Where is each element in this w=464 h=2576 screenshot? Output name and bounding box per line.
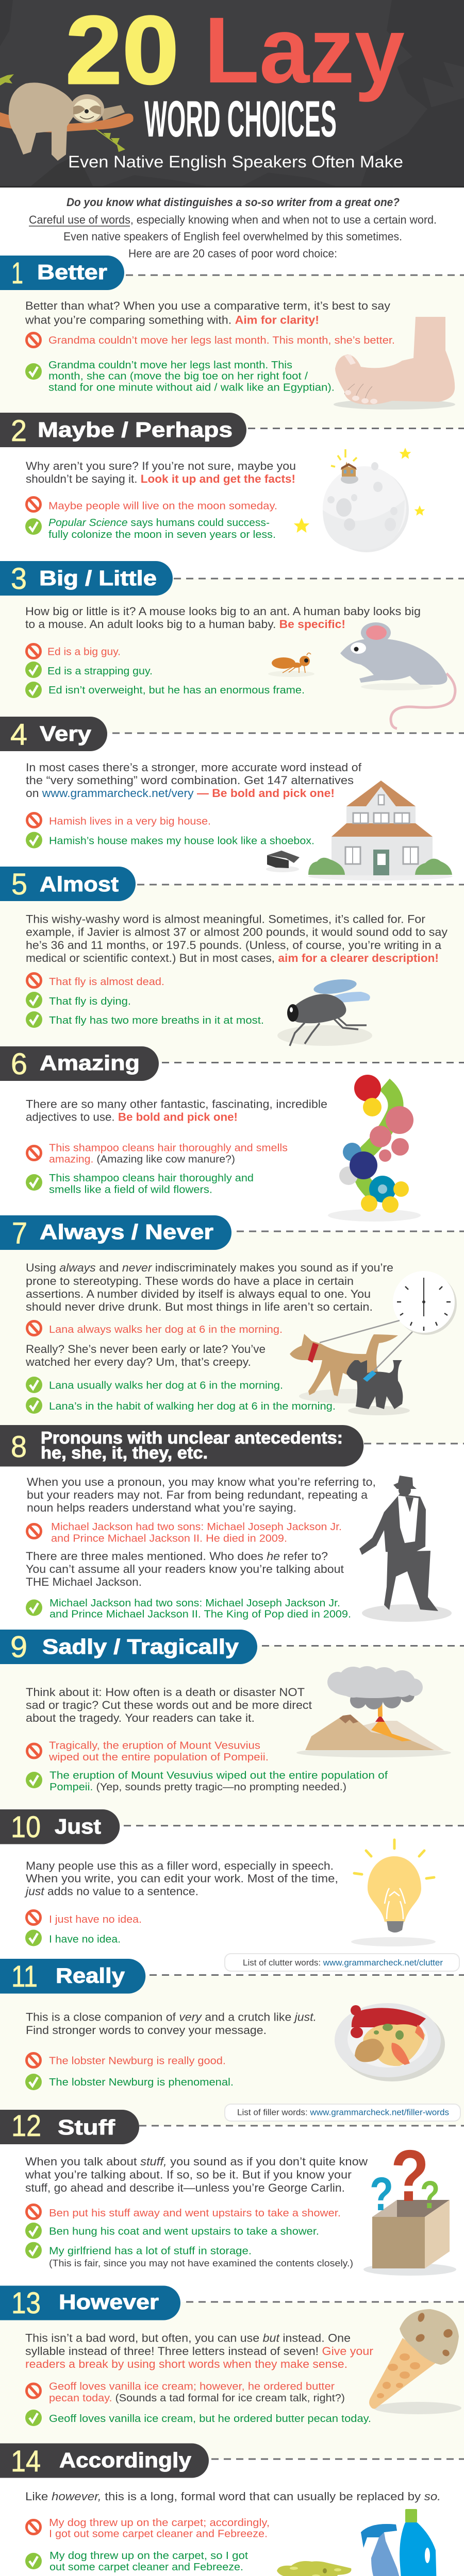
wrong example: Ed is a big guy. [47, 647, 121, 658]
text block [27, 1476, 376, 1514]
right example [26, 1598, 351, 1620]
text block: just adds no value to a sentence. [24, 1885, 198, 1898]
illustration: mouse [340, 622, 455, 728]
heading: 8 Pronouns: 8 [11, 1430, 27, 1464]
right example: I have no idea. [49, 1934, 121, 1945]
text block [24, 1859, 338, 1898]
subtitle: Even Native English Speakers Often Make [68, 152, 403, 171]
heading: 7 Always / Never: 7 [12, 1217, 27, 1250]
right example [25, 2223, 319, 2239]
illustration: Michael Jackson silhouette [359, 1476, 452, 1622]
panel: header [0, 0, 464, 188]
illustration: box with question marks: ? [420, 2173, 440, 2217]
wrong example: I just have no idea. [49, 1914, 142, 1925]
heading: 13 However: 13 [11, 2286, 41, 2320]
right example: and Prince Michael Jackson II. The King of Pop died in 2009. [49, 1608, 351, 1620]
wrong example: amazing. (Amazing like cow manure?) [49, 1154, 235, 1165]
panel: introduction [29, 196, 437, 260]
panel: 1 Better [0, 256, 464, 429]
heading: 5 Almost: Almost [40, 872, 119, 896]
text block [26, 913, 448, 964]
right example: Hamish’s house makes my house look like a shoebox. [49, 836, 314, 847]
wrong example [27, 1321, 283, 1335]
heading: 12 Stuff [0, 2109, 464, 2144]
text block [26, 1686, 312, 1724]
text block: Why aren’t you sure? If you’re not sure, maybe you [26, 460, 296, 472]
text block [26, 761, 362, 800]
wrong example: Michael Jackson had two sons: Michael Joseph Jackson Jr. [51, 1521, 342, 1533]
right example: smells like a field of wild flowers. [49, 1184, 212, 1195]
text block: Using always and never indiscriminately makes you sound as if you’re [26, 1261, 393, 1274]
illustration: clock [393, 1271, 457, 1335]
heading: 8 Pronouns [0, 1425, 464, 1466]
right example: That fly has two more breaths in it at most. [49, 1015, 264, 1026]
right example [26, 1011, 264, 1028]
right example: The eruption of Mount Vesuvius wiped out the entire population of [49, 1770, 388, 1782]
heading: 10 Just: Just [55, 1815, 101, 1838]
right example [26, 992, 131, 1008]
callout: filler words [225, 2104, 460, 2121]
panel: 5 Almost [0, 867, 464, 1063]
text block [25, 2155, 368, 2194]
text block [25, 299, 390, 327]
wrong example [27, 2205, 341, 2219]
text block [26, 1261, 393, 1313]
right example: Lana’s in the habit of walking her dog at 6 in the morning. [49, 1401, 336, 1412]
right example: Popular Science says humans could success- [48, 517, 270, 529]
text block: prone to stereotyping. These words do have a place in certain [26, 1275, 354, 1287]
heading: 9 Sadly / Tragically: Sadly / Tragically [42, 1635, 239, 1658]
text block: Think about it: How often is a death or disaster NOT [26, 1686, 305, 1699]
panel: 6 Amazing [0, 1046, 464, 1231]
text block: assertions. A number divided by itself is always equal to one. You [26, 1287, 371, 1300]
text block: There are so many other fantastic, fascinating, incredible [26, 1098, 327, 1111]
intro line 2: Even native speakers of English feel overwhelmed by this sometimes. [63, 230, 402, 243]
heading: 5 Almost: 5 [11, 868, 27, 901]
illustration: vomit puddle [277, 2561, 351, 2576]
commentary: You can’t assume all your readers know you’re talking about [26, 1563, 344, 1575]
panel: 11 Really [0, 1959, 464, 2126]
wrong example [27, 1910, 142, 1925]
illustration: flower S [328, 1075, 421, 1222]
heading: 10 Just [0, 1809, 464, 1844]
heading: 4 Very [0, 717, 464, 752]
right example: out some carpet cleaner and Febreeze. [49, 2562, 243, 2573]
text block: When you talk about stuff, you sound as if you don’t quite know [25, 2155, 368, 2168]
right example [26, 832, 314, 849]
illustration: moon with church and stars [294, 448, 425, 552]
heading: 2 Maybe / Perhaps: 2 [11, 414, 27, 448]
wrong example [27, 813, 211, 827]
panel: 3 Big / Little [0, 561, 464, 733]
wrong example: I got out some carpet cleaner and Febreeze. [49, 2528, 268, 2539]
heading: 7 Always / Never: Always / Never [40, 1220, 213, 1244]
heading: 5 Almost [0, 867, 464, 901]
text block: to a mouse. An adult looks big to a human baby. Be specific! [25, 618, 345, 631]
panel: 7 Always / Never [0, 1215, 464, 1444]
illustration: volcano [296, 1666, 451, 1757]
wrong example: Maybe people will live on the moon someday. [48, 501, 277, 512]
text block: stuff, go ahead and describe it—unless you’re George Carlin. [25, 2181, 345, 2194]
text block [26, 2010, 317, 2037]
right example [26, 1173, 254, 1195]
callout: filler words: List of filler words: www.grammarcheck.net/filler-words [237, 2107, 449, 2117]
right example: Ed is a strapping guy. [47, 666, 153, 677]
heading: 14 Accordingly: 14 [11, 2445, 41, 2478]
text block: what you’re talking about. If so, so be it. But if you know your [25, 2168, 352, 2181]
panel: 8 Pronouns with unclear antecedents [0, 1425, 464, 1646]
heading: 11 Really: 11 [11, 1960, 38, 1993]
heading: 2 Maybe / Perhaps [0, 413, 464, 448]
text block: This wishy-washy word is almost meaningful. Sometimes, it’s called for. For [26, 913, 425, 926]
text block: When you write, you can edit your work. Most of the time, [26, 1872, 338, 1885]
illustration: box with question marks [363, 2135, 456, 2276]
text block: Many people use this as a filler word, especially in speech. [26, 1859, 334, 1872]
wrong example [27, 974, 164, 988]
right example [26, 1377, 283, 1393]
heading: 6 Amazing: Amazing [40, 1051, 140, 1075]
text block: This isn’t a bad word, but often, you can use but instead. One [25, 2332, 351, 2345]
heading: 14 Accordingly [0, 2443, 464, 2478]
text block: should never drive drunk. But most things in life aren’t so certain. [26, 1300, 373, 1313]
wrong example [27, 498, 277, 512]
commentary: THE Michael Jackson. [26, 1575, 142, 1588]
right example: This shampoo cleans hair thoroughly and [49, 1173, 254, 1184]
wrong example: This shampoo cleans hair thoroughly and smells [49, 1142, 288, 1154]
wrong example [27, 1740, 269, 1763]
text block: In most cases there’s a stronger, more accurate word instead of [26, 761, 362, 774]
wrong example: Geoff loves vanilla ice cream; however, he ordered butter [49, 2381, 335, 2393]
right example [25, 2410, 371, 2426]
right example [25, 2074, 234, 2090]
right example: My dog threw up on the carpet, so I got [49, 2550, 248, 2562]
commentary: Really? She’s never been early or late? You’ve [26, 1343, 266, 1355]
text block [25, 605, 421, 631]
right example: My girlfriend has a lot of stuff in storage. [49, 2246, 252, 2257]
heading: 1 Better: 1 [11, 257, 23, 290]
right example: fully colonize the moon in seven years or less. [48, 529, 276, 540]
right example: Lana usually walks her dog at 6 in the morning. [49, 1380, 283, 1391]
heading: 9 Sadly / Tragically: 9 [10, 1631, 27, 1664]
intro question: Do you know what distinguishes a so-so writer from a great one? [67, 196, 400, 209]
illustration: lobster plate [335, 2003, 445, 2081]
heading: 12 Stuff: 12 [11, 2109, 41, 2143]
right example: Ben hung his coat and went upstairs to take a shower. [49, 2226, 319, 2238]
wrong example [27, 2054, 226, 2067]
text block: but your readers may not. Far from being redundant, repeating a [27, 1488, 368, 1501]
wrong example [27, 2517, 270, 2539]
right example: That fly is dying. [49, 996, 131, 1007]
heading: 6 Amazing: 6 [11, 1047, 27, 1081]
heading: 3 Big / Little: Big / Little [39, 566, 157, 590]
wrong example [27, 1142, 288, 1165]
wrong example: The lobster Newburg is really good. [49, 2056, 226, 2067]
illustration: ice cream cone [369, 2309, 461, 2414]
illustration: fly [277, 977, 372, 1046]
right example: month, she can (move the big toe on her right foot / [48, 371, 308, 382]
wrong example: Ben put his stuff away and went upstairs to take a shower. [49, 2208, 341, 2219]
text block: sad or tragic? Cut these words out and be more direct [26, 1699, 312, 1711]
text block: noun helps readers understand what you’re saying. [27, 1501, 296, 1514]
illustration: cleaning bottles [361, 2509, 445, 2576]
right example: Geoff loves vanilla ice cream, but he ordered butter pecan today. [49, 2413, 371, 2425]
illustration: ant [268, 653, 314, 677]
heading: 4 Very: 4 [10, 718, 27, 752]
right example: Michael Jackson had two sons: Michael Joseph Jackson Jr. [49, 1598, 340, 1609]
right example [26, 1770, 388, 1793]
wrong example [27, 644, 121, 658]
heading: 8 Pronouns: he, she, it, they, etc. [41, 1443, 208, 1462]
text block [26, 460, 296, 485]
right example: stand for one minute without aid / walk like an Egyptian). [48, 382, 335, 393]
text block: about the tragedy. Your readers can take it. [26, 1711, 255, 1724]
wrong example [27, 1521, 342, 1545]
intro line 1: Careful use of words, especially knowing when and when not to use a certain word. [29, 213, 437, 226]
heading: 14 Accordingly: Accordingly [59, 2448, 191, 2472]
text block: When you use a pronoun, you may know what you’re referring to, [27, 1476, 376, 1488]
wrong example: Hamish lives in a very big house. [49, 816, 211, 827]
heading: 3 Big / Little: 3 [11, 562, 27, 596]
right example [25, 662, 153, 678]
wrong example: Lana always walks her dog at 6 in the morning. [49, 1324, 283, 1335]
text block: How big or little is it? A mouse looks big to an ant. A human baby looks big [25, 605, 421, 618]
text block: Like however, this is a long, formal word that can usually be replaced by so. [25, 2490, 441, 2503]
right example [25, 2550, 248, 2573]
wrong example: Tragically, the eruption of Mount Vesuvius [49, 1740, 260, 1752]
illustration: box with question marks: ? [370, 2168, 393, 2221]
heading: 12 Stuff: Stuff [58, 2115, 115, 2139]
illustration: sloth on branch [0, 74, 134, 161]
illustration: shoebox [266, 851, 300, 872]
text block: Better than what? When you use a comparative term, it’s best to say [25, 299, 390, 312]
wrong example: pecan today. (Sounds a tad formal for ice cream talk, right?) [49, 2393, 345, 2404]
title: Lazy: Lazy [204, 0, 405, 103]
text block: he’s 36 and 11 months, or 197.5 pounds. (Unless, of course, you’re writing in a [26, 939, 442, 952]
right example [25, 517, 276, 540]
text block: shouldn’t be saying it. Look it up and get the facts! [26, 472, 295, 485]
intro line 3: Here are are 20 cases of poor word choice: [128, 247, 337, 260]
wrong example: and Prince Michael Jackson II. He died in 2009. [51, 1533, 287, 1545]
commentary: There are three males mentioned. Who does he refer to? [26, 1550, 328, 1563]
text block: on www.grammarcheck.net/very — Be bold and pick one! [26, 787, 335, 800]
heading: 11 Really [0, 1959, 464, 1994]
text block: Find stronger words to convey your message. [26, 2024, 267, 2037]
heading: 8 Pronouns: Pronouns with unclear antecedents: [41, 1428, 343, 1447]
callout: clutter words [225, 1954, 459, 1971]
text block: This is a close companion of very and a crutch like just. [26, 2010, 317, 2024]
right example: Grandma couldn’t move her legs last month. This [48, 360, 292, 371]
text block: readers a break by using short words when they make sense. [25, 2358, 347, 2370]
wrong example [27, 2381, 345, 2404]
illustration: house [308, 781, 453, 880]
heading: 6 Amazing [0, 1046, 464, 1081]
right example [25, 1930, 121, 1946]
wrong example: My dog threw up on the carpet; accordingly, [49, 2517, 270, 2529]
panel: 2 Maybe / Perhaps [0, 413, 464, 579]
commentary [25, 1343, 266, 1368]
wrong example: wiped out the entire population of Pompeii. [48, 1752, 269, 1763]
wrong example: That fly is almost dead. [49, 976, 164, 988]
text block: what you’re comparing something with. Aim for clarity! [25, 314, 319, 327]
illustration: box with question marks: ? [391, 2135, 429, 2217]
right example [25, 360, 335, 393]
heading: 10 Just: 10 [11, 1810, 41, 1844]
panel: 10 Just [0, 1809, 464, 1975]
right example: Ed isn’t overweight, but he has an enormous frame. [48, 685, 305, 696]
text block: syllable instead of three! Three letters instead of seven! Give your [25, 2345, 373, 2358]
panel: 14 Accordingly [0, 2443, 464, 2576]
illustration: foot [334, 317, 455, 410]
heading: 1 Better: Better [37, 260, 107, 284]
callout: clutter words: List of clutter words: www.grammarcheck.net/clutter [243, 1958, 443, 1968]
text block: adjectives to use. Be bold and pick one! [26, 1111, 238, 1123]
right example: (This is fair, since you may not have examined the contents closely.) [49, 2258, 353, 2268]
wrong example: Grandma couldn’t move her legs last month. This month, she’s better. [48, 335, 395, 346]
panel: 4 Very [0, 717, 464, 885]
panel: 9 Sadly / Tragically [0, 1630, 464, 1826]
commentary [26, 1550, 344, 1588]
right example [26, 1397, 336, 1414]
panel: 12 Stuff [0, 2109, 464, 2302]
text block [25, 2332, 373, 2370]
text block: example, if Javier is almost 37 or almost 200 pounds, it would sound odd to say [26, 925, 448, 939]
heading: 13 However [0, 2285, 464, 2320]
text block: the “very something” word combination. Get 147 alternatives [26, 774, 354, 787]
commentary: watched her every day? Um, that’s creepy. [25, 1355, 251, 1368]
heading: 2 Maybe / Perhaps: Maybe / Perhaps [38, 418, 233, 442]
right example: Pompeii. (Yep, sounds pretty tragic—no prompting needed.) [49, 1782, 346, 1793]
heading: 4 Very: Very [40, 722, 91, 745]
text block: medical or scientific context.) But in most cases, aim for a clearer description! [26, 952, 439, 964]
panel: 13 However [0, 2285, 464, 2459]
heading: 11 Really: Really [56, 1964, 125, 1988]
right example [25, 682, 305, 698]
illustration: light bulb [351, 1840, 436, 1946]
heading: 13 However: However [59, 2290, 159, 2314]
heading: 9 Sadly / Tragically [0, 1630, 464, 1664]
illustration: two dogs on leashes [290, 1320, 412, 1415]
heading: 3 Big / Little [0, 561, 464, 596]
right example: The lobster Newburg is phenomenal. [49, 2077, 234, 2088]
right example [25, 2242, 353, 2268]
text block [26, 1098, 327, 1123]
heading: 7 Always / Never [0, 1215, 464, 1250]
heading: 1 Better [0, 256, 464, 290]
